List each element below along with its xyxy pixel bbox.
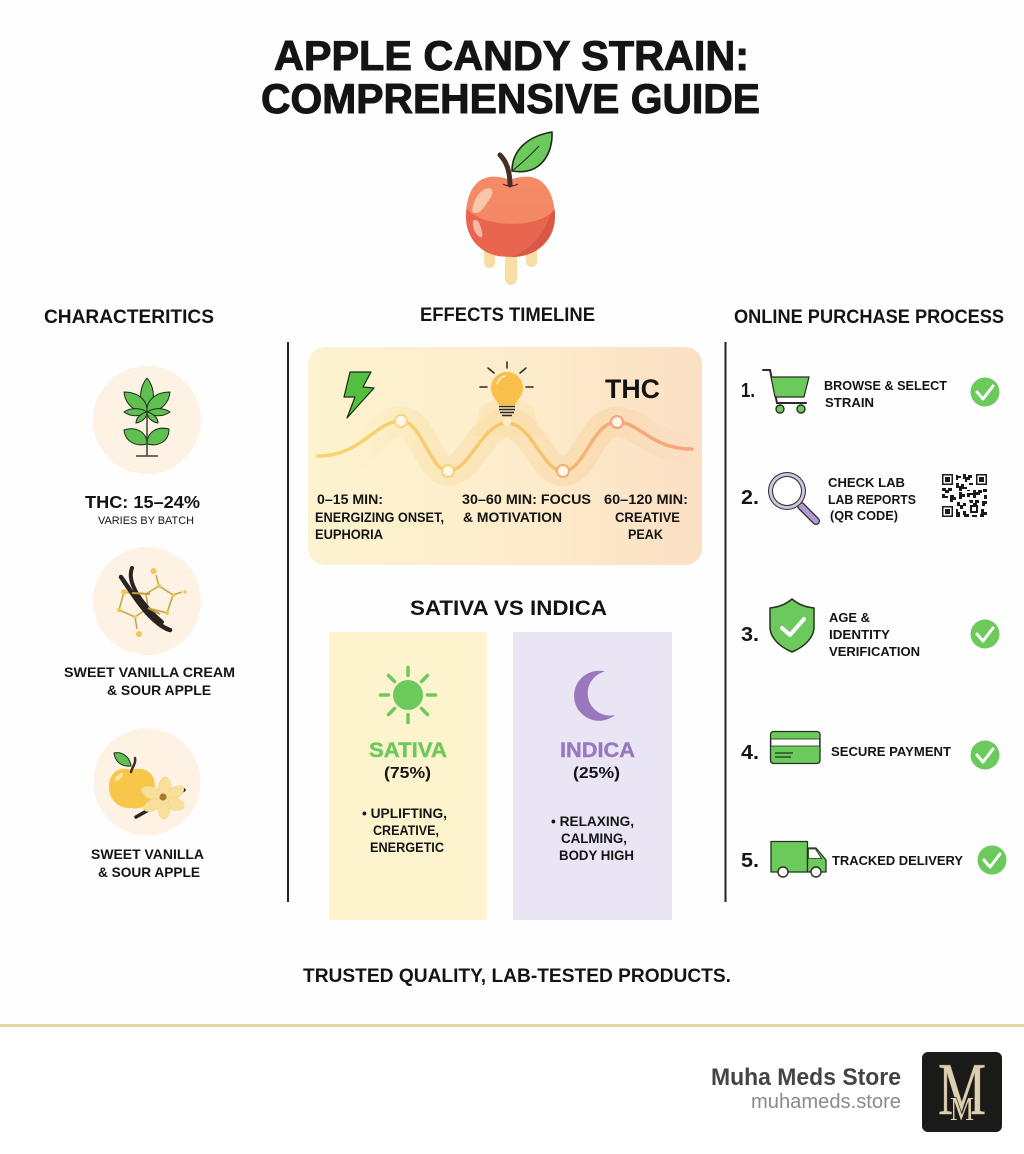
heading: sativa vs indica: SATIVA VS INDICA [410, 597, 607, 620]
label: THC: THC [605, 374, 660, 404]
brand name: Muha Meds Store [711, 1064, 901, 1091]
text: creative stage: PEAK [628, 527, 663, 542]
step 5: tracked delivery: 5. [741, 850, 759, 872]
step 4: secure payment: 4. [741, 742, 759, 764]
right divider [724, 342, 726, 902]
text: indica percentage: (25%) [573, 765, 620, 782]
icon: yellow apple and vanilla flower [94, 728, 200, 836]
text: THC range: VARIES BY BATCH [98, 515, 194, 527]
icon: moon [574, 671, 615, 721]
text: indica label: INDICA [560, 738, 635, 762]
text: creative stage: 60–120 MIN: [604, 492, 688, 507]
title [261, 32, 760, 122]
text: flavor profile: & SOUR APPLE [107, 682, 211, 698]
footer [0, 1024, 1024, 1154]
step 1: browse and select [741, 370, 1000, 413]
heading: characteristics: CHARACTERITICS [44, 307, 214, 328]
step 3: age and identity verification: IDENTITY [829, 627, 890, 642]
text: flavor profile: SWEET VANILLA CREAM [64, 664, 235, 680]
step 4: secure payment: SECURE PAYMENT [831, 744, 951, 759]
icon: lightning bolt [344, 372, 374, 418]
panel: indica [513, 632, 672, 920]
step 1: browse and select: BROWSE & SELECT [824, 378, 947, 393]
chart: effects curve [318, 397, 692, 477]
icon: light bulb [480, 362, 533, 416]
text: creative stage: CREATIVE [615, 510, 680, 525]
text: indica effects [551, 814, 634, 863]
step 3: age and identity verification: 3. [741, 624, 759, 646]
icon: QR code [942, 474, 987, 517]
step 5: tracked delivery [741, 842, 1006, 877]
title: APPLE CANDY STRAIN: [274, 32, 749, 79]
tagline: TRUSTED QUALITY, LAB-TESTED PRODUCTS. [303, 966, 731, 987]
step 3: age and identity verification: AGE & [829, 610, 870, 625]
panel: sativa [329, 632, 487, 920]
step 1: browse and select: 1. [741, 380, 755, 402]
text: focus stage [462, 492, 591, 525]
heading: effects timeline: EFFECTS TIMELINE [420, 305, 595, 326]
text: onset stage: 0–15 MIN: [317, 492, 383, 507]
text: onset stage: EUPHORIA [315, 527, 383, 542]
panel: effects timeline [308, 347, 702, 565]
step 2: check lab reports: 2. [741, 487, 759, 509]
panel: characteristics [64, 366, 235, 880]
text: focus stage: 30–60 MIN: FOCUS [462, 492, 591, 507]
step 3: age and identity verification: VERIFICATION [829, 644, 920, 659]
title: COMPREHENSIVE GUIDE [261, 75, 760, 122]
text: sativa effects: CREATIVE, [373, 823, 439, 838]
icon: cannabis plant [93, 366, 201, 474]
icon: vanilla molecule [93, 547, 201, 655]
text: creative stage [604, 492, 688, 542]
logo: M [950, 1091, 974, 1128]
left divider [287, 342, 289, 902]
text: indica effects: CALMING, [561, 831, 627, 846]
step 4: secure payment [741, 732, 1000, 770]
step 2: check lab reports: (QR CODE) [830, 508, 898, 523]
panel: purchase process [741, 370, 1006, 877]
text: indica effects: BODY HIGH [559, 848, 634, 863]
text: sativa effects: • UPLIFTING, [362, 806, 447, 821]
step 5: tracked delivery: TRACKED DELIVERY [832, 853, 963, 868]
text: taste profile [91, 846, 204, 880]
text: taste profile: & SOUR APPLE [98, 864, 200, 880]
text: sativa effects: ENERGETIC [370, 840, 444, 855]
brand URL: muhameds.store [751, 1091, 901, 1113]
step 2: check lab reports: CHECK LAB [828, 475, 905, 490]
text: focus stage: & MOTIVATION [463, 510, 562, 525]
text: indica effects: • RELAXING, [551, 814, 634, 829]
step 1: browse and select: STRAIN [825, 395, 874, 410]
step 2: check lab reports [741, 472, 987, 523]
text: onset stage [315, 492, 444, 542]
icon: sun [380, 668, 436, 722]
step 2: check lab reports: LAB REPORTS [828, 492, 916, 507]
text: sativa effects [362, 806, 447, 855]
text: sativa percentage: (75%) [384, 765, 431, 782]
text: flavor profile [64, 664, 235, 698]
text: THC range: THC: 15–24% [85, 492, 200, 512]
text: taste profile: SWEET VANILLA [91, 846, 204, 862]
text: THC range [85, 492, 200, 527]
step 3: age and identity verification [741, 599, 1000, 659]
text: onset stage: ENERGIZING ONSET, [315, 510, 444, 525]
text: sativa label: SATIVA [369, 738, 447, 762]
heading: online purchase process: ONLINE PURCHASE PROCESS [734, 307, 1004, 328]
logo: M [938, 1049, 986, 1131]
icon: candy apple [466, 132, 555, 285]
